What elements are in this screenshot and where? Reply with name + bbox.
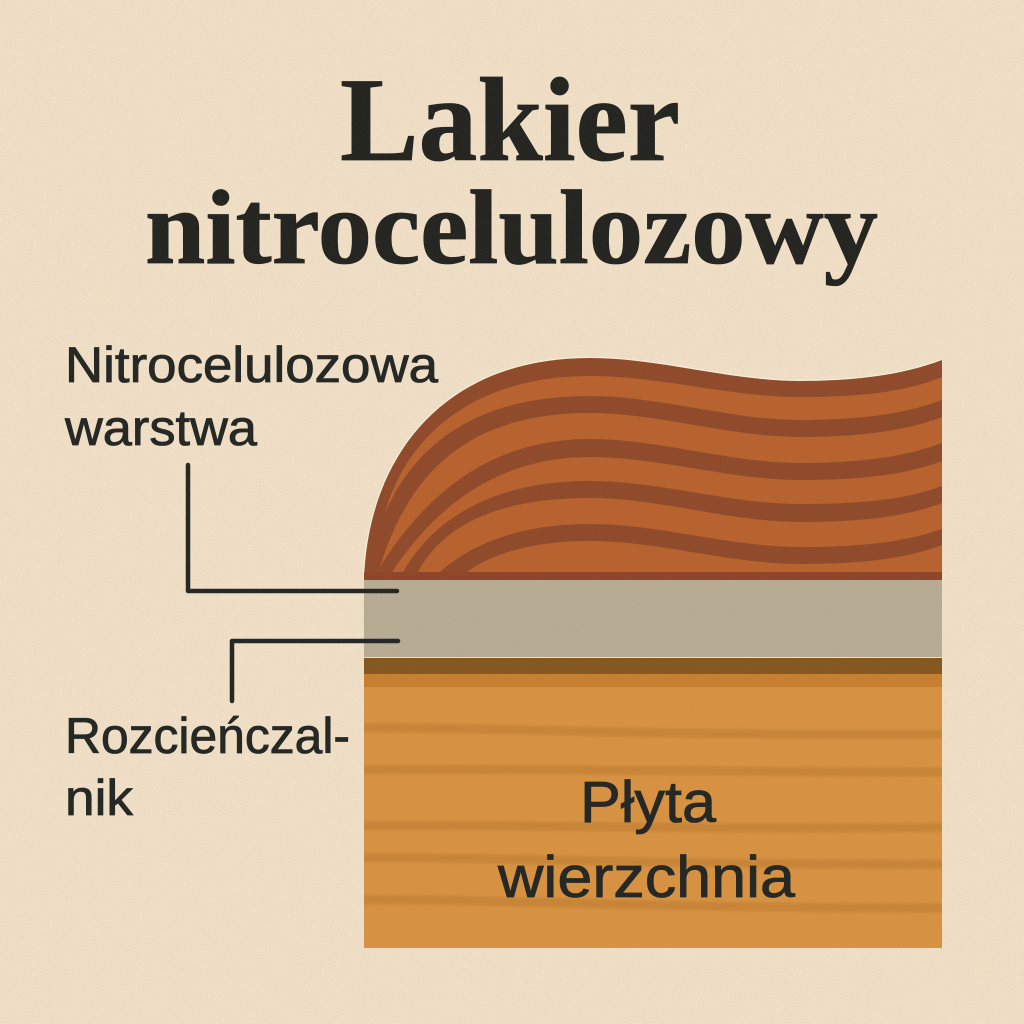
layer: wavy nitrocellulose coating bbox=[364, 358, 942, 580]
label: Płyta wierzchnia: wierzchnia bbox=[497, 845, 796, 910]
label: Płyta wierzchnia: Płyta bbox=[580, 770, 717, 835]
callout line: coating leader bbox=[188, 465, 397, 591]
layer: wood substrate bbox=[340, 674, 970, 948]
callout line: solvent leader bbox=[232, 641, 398, 701]
label: Rozcieńczalnik: Rozcieńczal- bbox=[65, 708, 350, 764]
layer: grey solvent band bbox=[364, 580, 942, 657]
label: Nitrocelulozowa warstwa bbox=[64, 337, 438, 456]
label: Płyta wierzchnia bbox=[497, 770, 796, 910]
label: Rozcieńczalnik bbox=[65, 708, 350, 826]
layer: dark brown strip bbox=[364, 658, 942, 674]
label: Rozcieńczalnik: nik bbox=[65, 770, 134, 826]
label: Nitrocelulozowa warstwa: Nitrocelulozowa bbox=[65, 337, 438, 393]
label: Nitrocelulozowa warstwa: warstwa bbox=[64, 400, 257, 456]
title: nitrocelulozowy bbox=[145, 169, 878, 286]
panel: layered cross-section bbox=[340, 358, 970, 948]
title: Lakier bbox=[340, 53, 680, 186]
title bbox=[145, 53, 878, 286]
